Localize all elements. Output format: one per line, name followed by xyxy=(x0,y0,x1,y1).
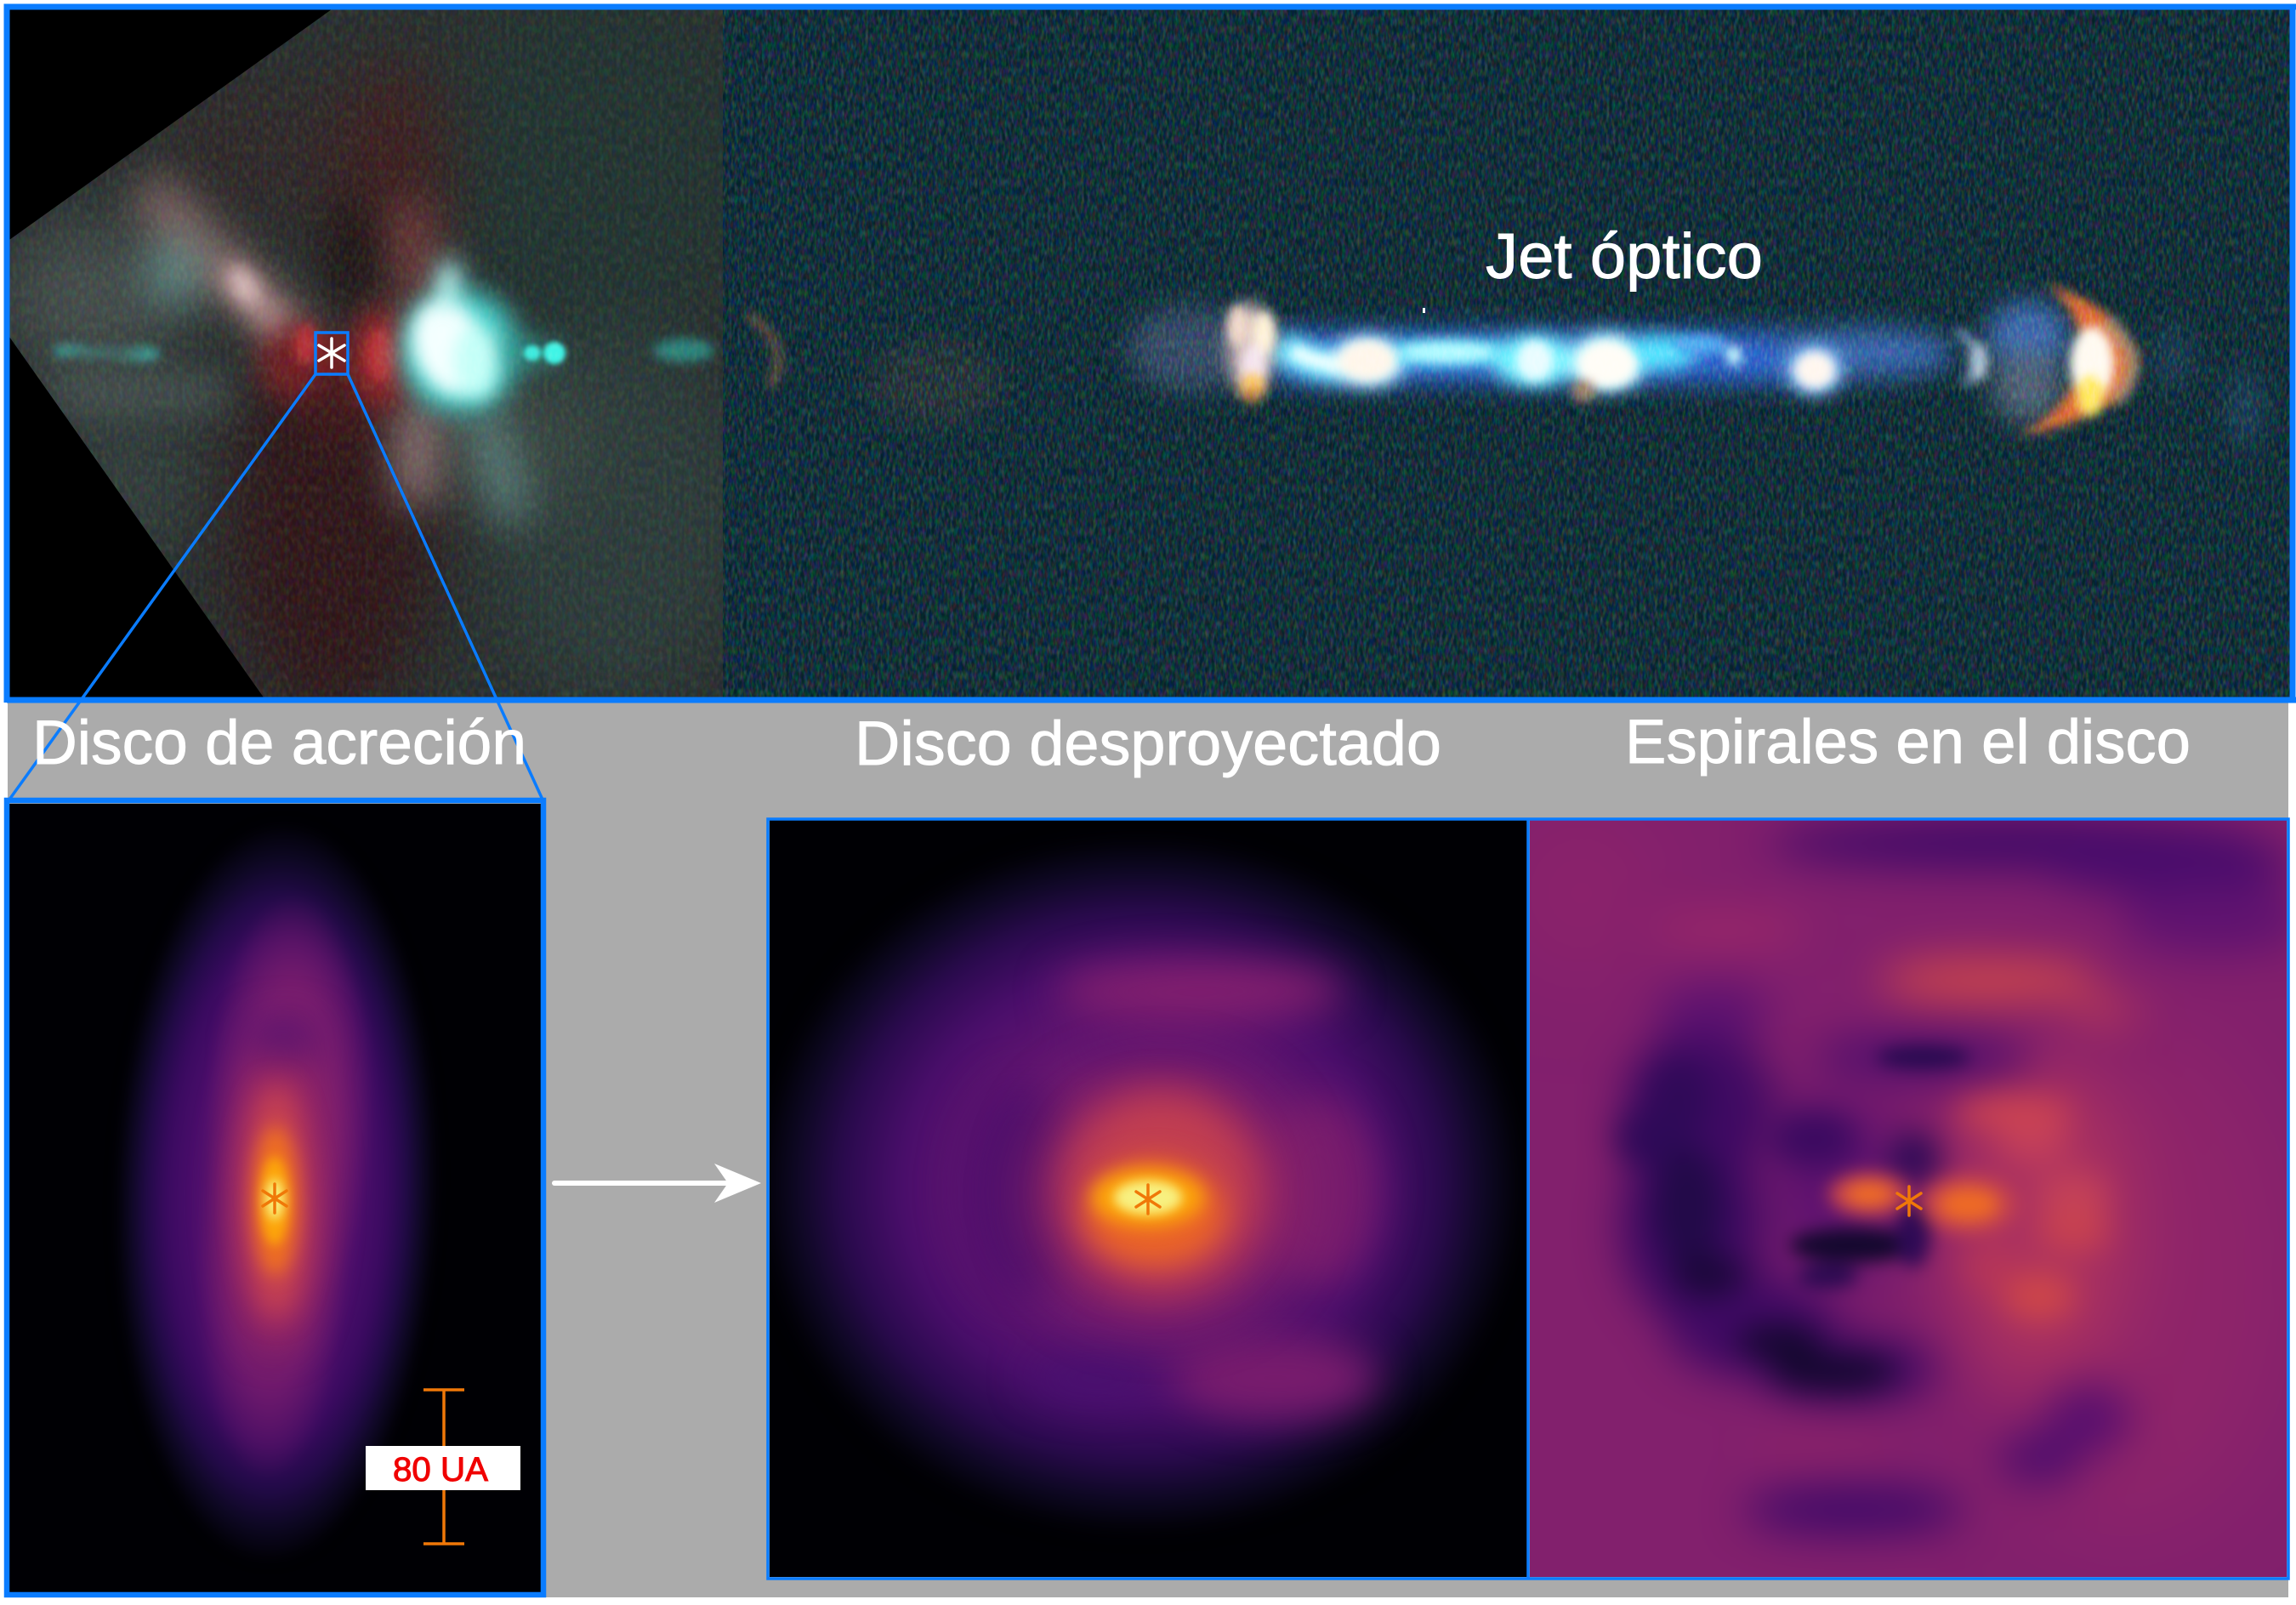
gray background xyxy=(8,703,2288,1597)
icon: orange star xyxy=(263,1184,287,1213)
panel frames for lower images xyxy=(768,819,2288,1579)
heading: spirals: Espirales en el disco xyxy=(1625,708,2191,777)
jet: glow halos xyxy=(1228,302,1844,396)
icon: orange star xyxy=(1897,1187,1921,1215)
panel: accretion disk edge-on xyxy=(7,800,543,1595)
panel: deprojected disk xyxy=(759,820,1528,1577)
heading: deprojected disk: Disco desproyectado xyxy=(855,709,1441,778)
scale label xyxy=(366,1446,520,1490)
star marker box xyxy=(315,333,348,374)
icon: white star xyxy=(319,339,344,367)
scale bar xyxy=(423,1390,464,1544)
speckle on nebula xyxy=(9,9,723,697)
faint left bow shock xyxy=(748,315,779,387)
zoom guide lines xyxy=(9,374,543,800)
jet: main bow shock xyxy=(2017,285,2140,435)
speckle noise xyxy=(723,9,2290,697)
jet: haze and blue band xyxy=(1127,300,2262,449)
arrow xyxy=(554,1164,761,1203)
infrared nebula image xyxy=(0,0,740,723)
icon: orange star xyxy=(1136,1185,1160,1214)
heading: optical jet: Jet óptico xyxy=(1486,220,1763,292)
scale label: 80 UA xyxy=(393,1451,488,1488)
panel: top telescope composite xyxy=(0,0,2290,723)
panel: spirals residual xyxy=(1480,766,2296,1605)
jet: bright knots xyxy=(1228,305,1986,403)
small star dot xyxy=(1423,308,1425,313)
top panel frame xyxy=(7,7,2296,703)
optical jet background xyxy=(723,9,2290,697)
heading: accretion disk: Disco de acreción xyxy=(32,709,526,777)
